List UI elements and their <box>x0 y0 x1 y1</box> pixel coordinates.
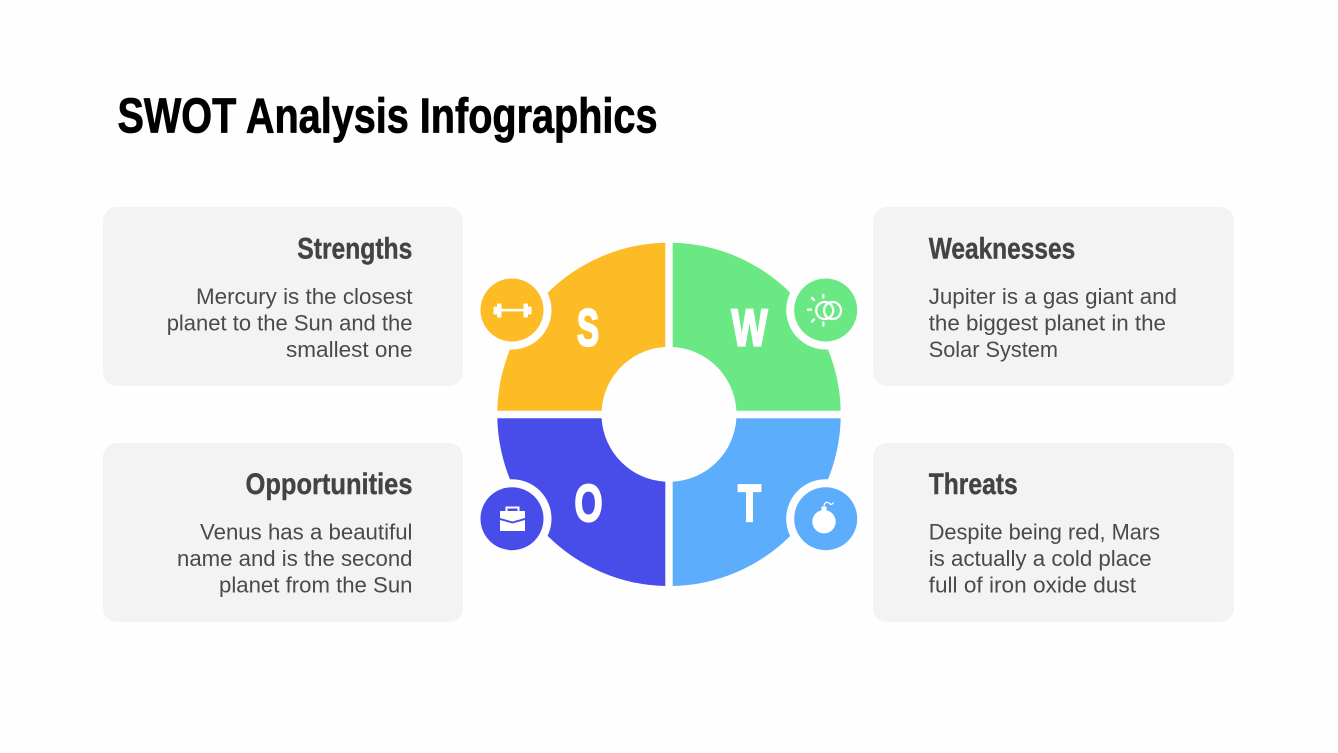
icon: briefcase <box>472 479 552 558</box>
letter O: O <box>574 475 602 533</box>
segment: O <box>497 418 665 586</box>
letter S: S <box>577 300 599 358</box>
text: opportunities description: name and is the second <box>177 546 412 571</box>
panel: threats <box>873 443 1234 622</box>
text: opportunities description: planet from the Sun <box>219 572 412 597</box>
text: threats description <box>929 519 1160 597</box>
text: weaknesses description <box>929 284 1177 362</box>
text: opportunities description <box>177 519 412 597</box>
icon: bomb <box>786 479 865 558</box>
text: opportunities description: Venus has a beautiful <box>200 519 412 544</box>
text: threats description: full of iron oxide dust <box>929 572 1137 597</box>
SWOT ring diagram <box>472 243 865 586</box>
text: threats description: Despite being red, Mars <box>929 519 1160 544</box>
panel: weaknesses <box>873 207 1234 386</box>
text: strengths description: smallest one <box>286 337 412 362</box>
text: weaknesses description: the biggest planet in the <box>929 311 1166 336</box>
icon: sun and rings <box>786 270 865 350</box>
text: weaknesses description: Solar System <box>929 337 1058 362</box>
segment: T <box>673 418 841 586</box>
text: strengths description: Mercury is the closest <box>196 284 413 309</box>
heading: opportunities: Opportunities <box>246 468 412 501</box>
text: strengths description: planet to the Sun and the <box>167 311 412 336</box>
icon: dumbbell <box>472 270 552 350</box>
heading: threats: Threats <box>929 468 1018 501</box>
panel: strengths <box>103 207 463 386</box>
heading: weaknesses: Weaknesses <box>929 232 1075 265</box>
heading: strengths: Strengths <box>297 232 412 265</box>
letter T: T <box>738 475 761 533</box>
title: SWOT Analysis Infographics <box>118 90 658 144</box>
text: threats description: is actually a cold place <box>929 546 1152 571</box>
text: weaknesses description: Jupiter is a gas giant and <box>929 284 1177 309</box>
panel: opportunities <box>103 443 463 622</box>
segment: W <box>673 243 841 411</box>
letter W: W <box>732 300 768 358</box>
segment: S <box>497 243 665 411</box>
text: strengths description <box>167 284 413 362</box>
